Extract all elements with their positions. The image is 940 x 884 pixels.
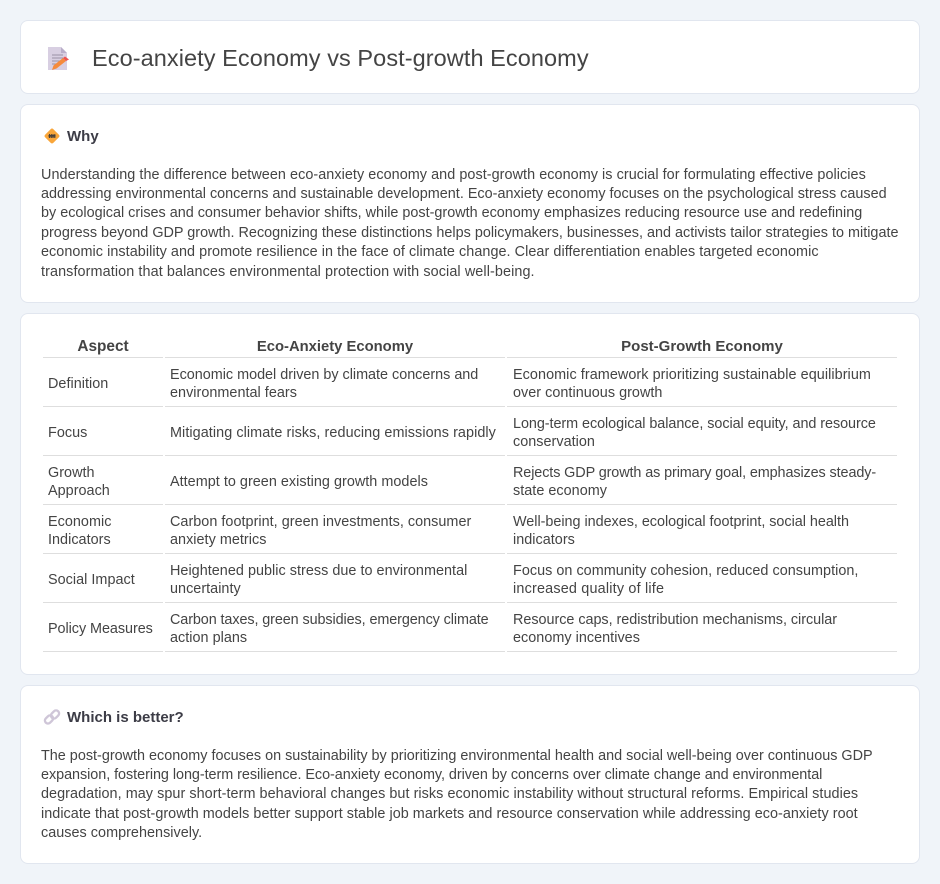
- cell: definition eco-anxiety: [170, 367, 478, 401]
- cell: definition eco-anxiety: environmental fears: [170, 385, 297, 401]
- text block: why: addressing environmental concerns and sustainable development. Eco-anxiety economy focuses on the psychological stress caused: [41, 186, 887, 202]
- cell: policy post-growth: economy incentives: [513, 630, 640, 646]
- row: growth approach: [48, 465, 110, 499]
- text block: which is better: [41, 748, 873, 841]
- panel: which is better card: [20, 685, 920, 864]
- cell: definition post-growth: [513, 367, 871, 401]
- cell: focus eco-anxiety: Mitigating climate risks, reducing emissions rapidly: [170, 425, 496, 441]
- icon: document with pencil: [48, 47, 69, 70]
- cell: indicators post-growth: indicators: [513, 532, 575, 548]
- table header: post-growth economy: Post-Growth Economy: [621, 338, 783, 355]
- cell: social post-growth: [513, 563, 858, 597]
- cell: policy eco-anxiety: Carbon taxes, green subsidies, emergency climate: [170, 612, 489, 628]
- text block: which is better: degradation, may spur short-term behavioral changes but risks economic instability without structural reforms. Empirical studies: [41, 786, 858, 802]
- cell: social eco-anxiety: [170, 563, 467, 597]
- row: focus: Focus: [48, 425, 87, 441]
- row: definition: Definition: [48, 376, 108, 392]
- text block: why: by ecological crises and consumer behavior shifts, while post-growth economy emphasizes reducing resource use and redefining: [41, 205, 862, 221]
- cell: focus post-growth: Long-term ecological balance, social equity, and resource: [513, 416, 876, 432]
- cell: policy post-growth: [513, 612, 837, 646]
- text block: why: progress beyond GDP growth. Recognizing these distinctions helps policymakers, businesses, and activists tailor strategies to mitigate: [41, 225, 898, 241]
- cell: definition post-growth: over continuous growth: [513, 385, 662, 401]
- panel: comparison table card: [20, 313, 920, 675]
- cell: focus post-growth: [513, 416, 876, 450]
- row: social impact: Social Impact: [48, 572, 135, 588]
- panel: why card: [20, 104, 920, 303]
- cell: growth eco-anxiety: Attempt to green existing growth models: [170, 474, 428, 490]
- text block: why: economic instability and promote resilience in the face of climate change. Clear differentiation enables targeted economic: [41, 244, 819, 260]
- text block: which is better: causes comprehensively.: [41, 825, 202, 841]
- heading: which is better: Which is better?: [67, 709, 184, 726]
- text block: which is better: expansion, fostering long-term resilience. Eco-anxiety economy, driven by concerns over climate change and environmental: [41, 767, 822, 783]
- cell: indicators eco-anxiety: Carbon footprint, green investments, consumer: [170, 514, 471, 530]
- cell: indicators eco-anxiety: anxiety metrics: [170, 532, 266, 548]
- text block: why: Understanding the difference between eco-anxiety economy and post-growth economy is crucial for formulating effective policies: [41, 166, 866, 182]
- text block: which is better: indicate that post-growth models better support stable job markets and resource conservation while addressing eco-anxiety root: [41, 806, 858, 822]
- cell: policy eco-anxiety: [170, 612, 489, 646]
- cell: social eco-anxiety: Heightened public stress due to environmental: [170, 563, 467, 579]
- heading: why: Why: [67, 128, 99, 145]
- icon: chain link: [44, 709, 60, 725]
- cell: focus post-growth: conservation: [513, 434, 595, 450]
- cell: indicators post-growth: Well-being indexes, ecological footprint, social health: [513, 514, 849, 530]
- title: Eco-anxiety Economy vs Post-growth Economy: [92, 45, 589, 71]
- row: growth approach: Growth: [48, 465, 95, 481]
- cell: policy eco-anxiety: action plans: [170, 630, 247, 646]
- cell: social post-growth: increased quality of life: [513, 581, 664, 597]
- cell: growth post-growth: [513, 465, 876, 499]
- cell: indicators eco-anxiety: [170, 514, 472, 548]
- row: growth approach: Approach: [48, 483, 110, 499]
- cell: definition post-growth: Economic framework prioritizing sustainable equilibrium: [513, 367, 871, 383]
- cell: growth post-growth: state economy: [513, 483, 607, 499]
- panel: title card: [20, 20, 920, 94]
- table header: aspect: Aspect: [77, 338, 129, 355]
- text block: why: [41, 166, 898, 280]
- text block: why: transformation that balances environmental protection with social well-being.: [41, 264, 535, 280]
- icon: warning diamond: [44, 128, 60, 144]
- cell: growth post-growth: Rejects GDP growth as primary goal, emphasizes steady-: [513, 465, 876, 481]
- cell: social post-growth: Focus on community cohesion, reduced consumption,: [513, 563, 858, 579]
- text block: which is better: The post-growth economy focuses on sustainability by prioritizing environmental health and social well-being over continuous GDP: [41, 748, 873, 764]
- row: policy measures: Policy Measures: [48, 621, 153, 637]
- cell: definition eco-anxiety: Economic model driven by climate concerns and: [170, 367, 478, 383]
- table header: eco-anxiety economy: Eco-Anxiety Economy: [257, 339, 413, 355]
- row: economic indicators: Economic: [48, 514, 111, 530]
- row: economic indicators: [48, 514, 111, 548]
- cell: indicators post-growth: [513, 514, 849, 548]
- row: economic indicators: Indicators: [48, 532, 111, 548]
- cell: social eco-anxiety: uncertainty: [170, 581, 241, 597]
- cell: policy post-growth: Resource caps, redistribution mechanisms, circular: [513, 612, 837, 628]
